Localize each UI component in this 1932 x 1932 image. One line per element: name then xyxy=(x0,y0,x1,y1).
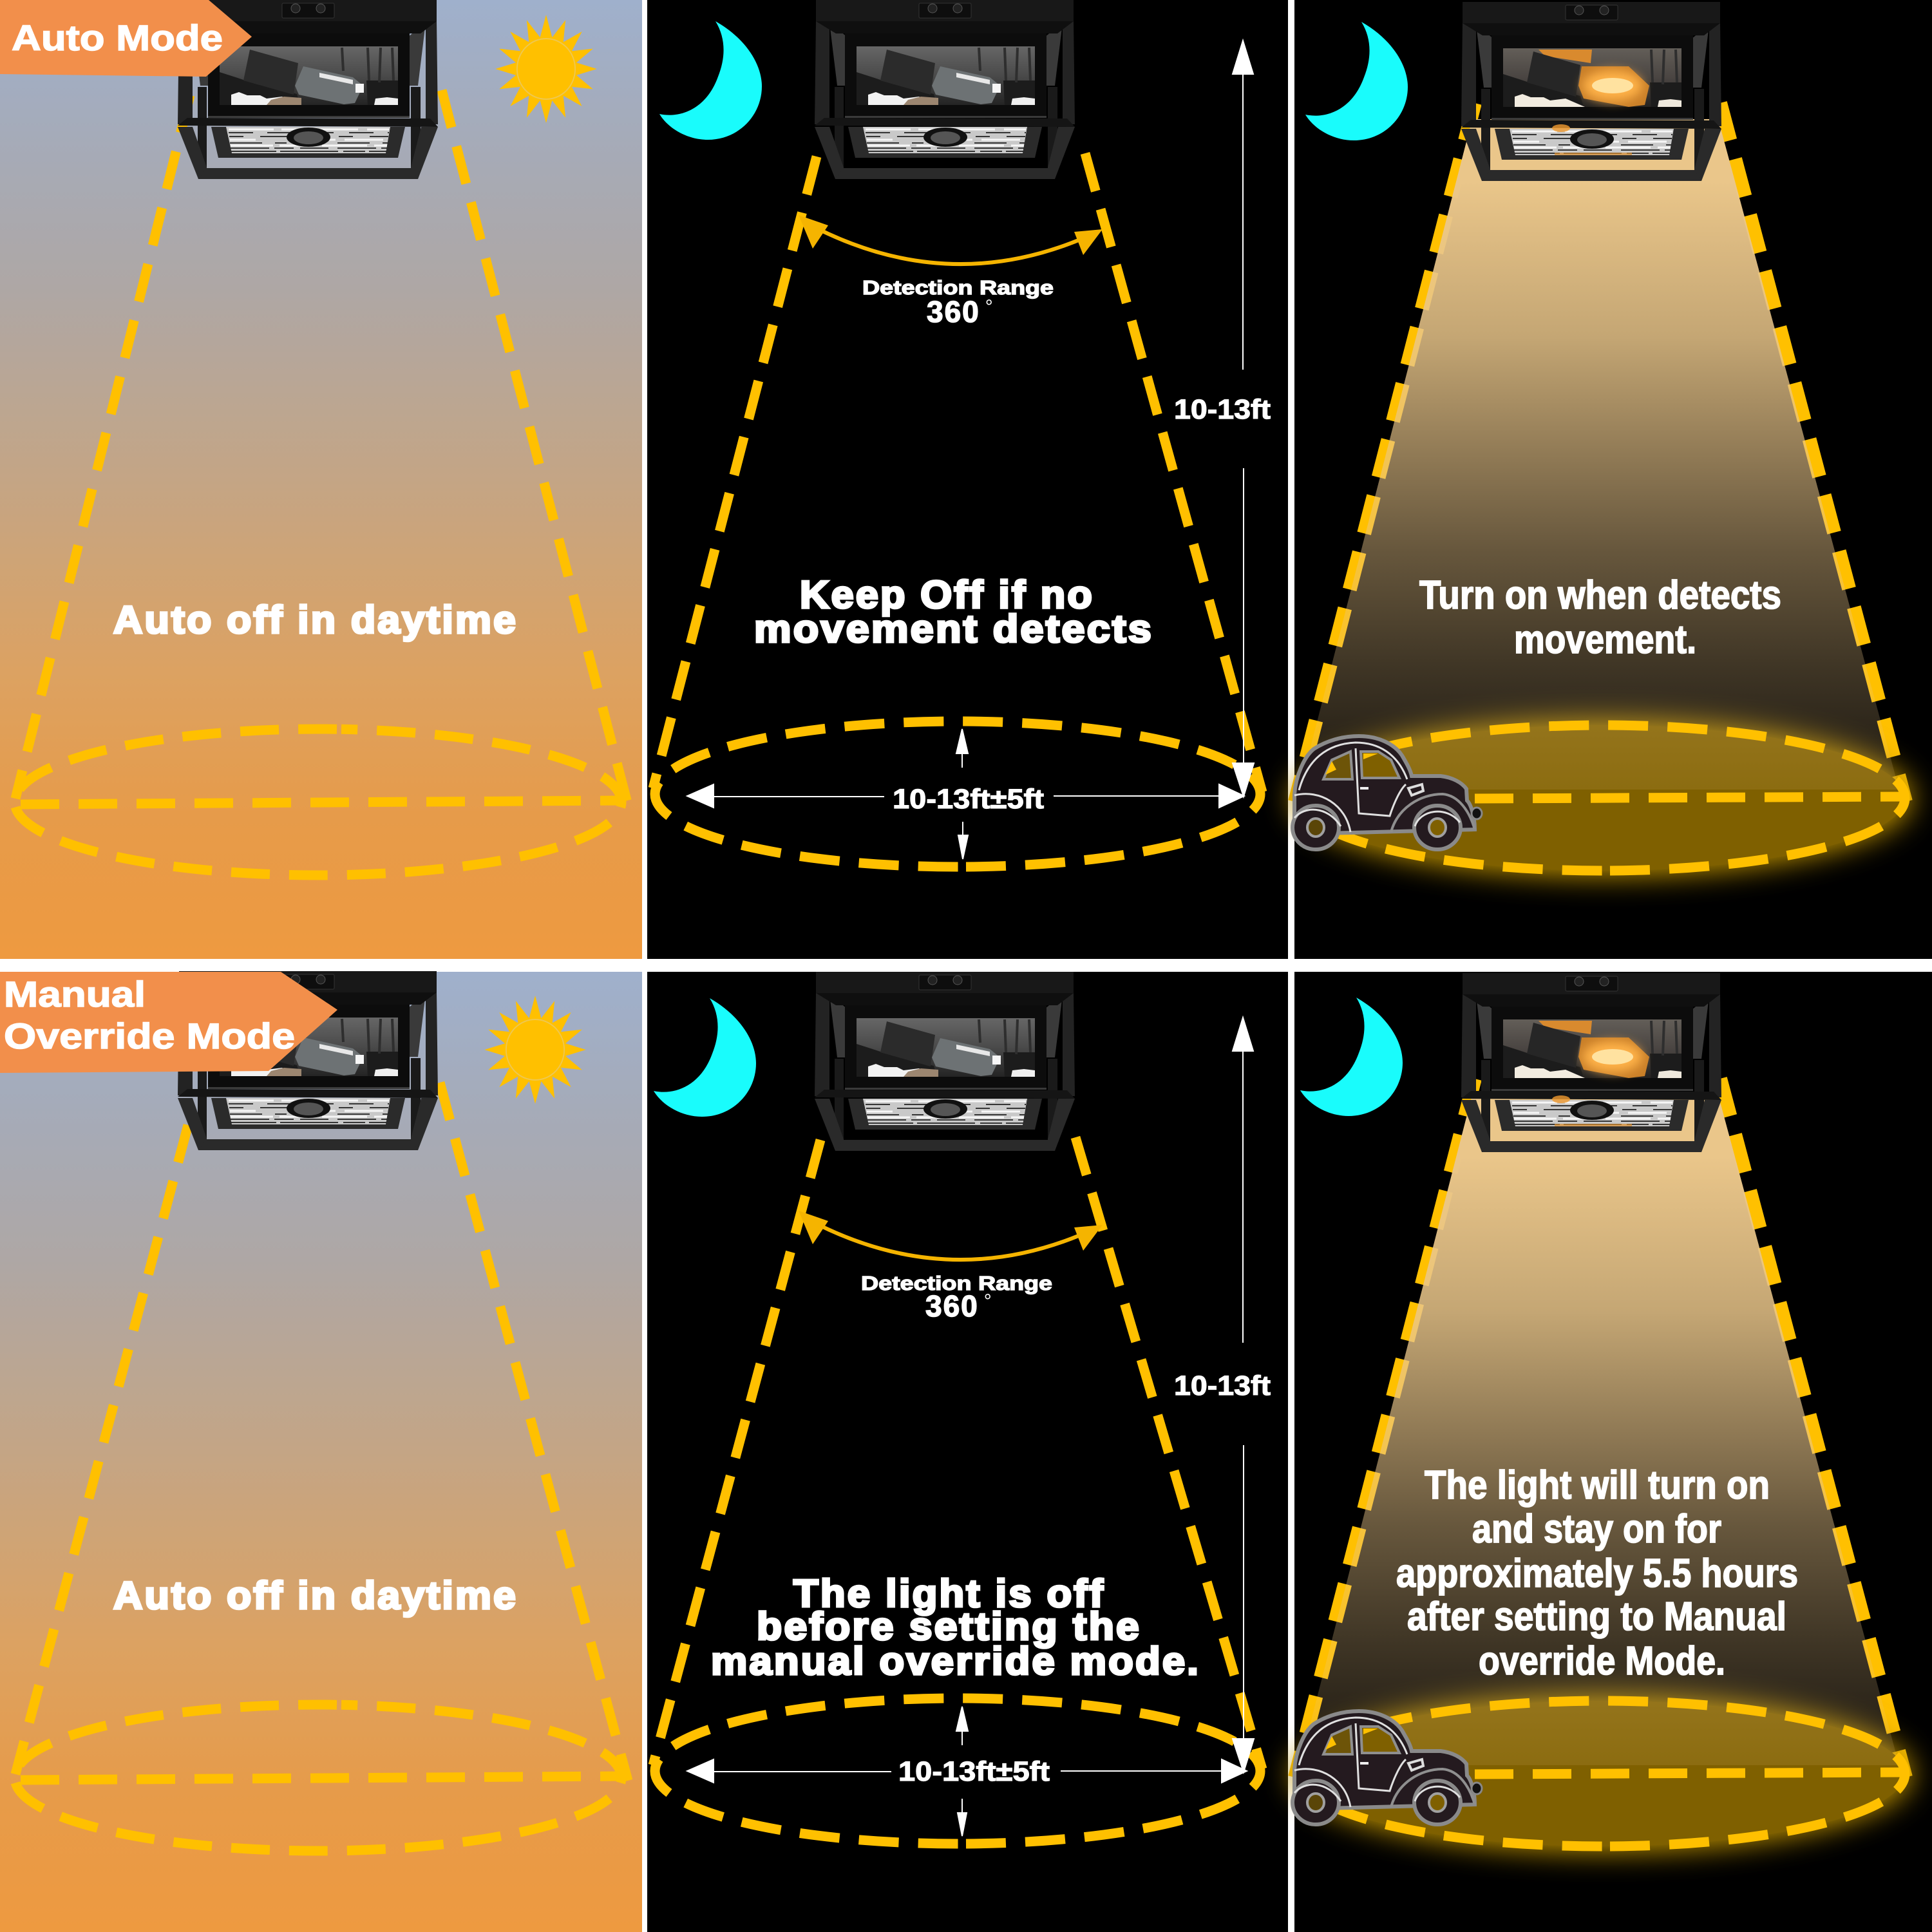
tag: manual override mode: Manual xyxy=(4,974,146,1014)
text: turn on when detects movement: Turn on when detects xyxy=(1419,573,1781,618)
ceiling lamp off xyxy=(178,0,438,179)
text: auto off in daytime: Auto off in daytime xyxy=(113,598,518,641)
panel: manual override before setting xyxy=(647,972,1288,1932)
detection ellipse xyxy=(15,1705,623,1851)
icon: moon xyxy=(1305,22,1408,140)
text: light is off before setting: The light is off xyxy=(793,1572,1105,1615)
tag: auto mode xyxy=(0,0,252,77)
ceiling lamp off xyxy=(815,972,1075,1151)
detection cone dashes xyxy=(15,90,628,805)
night background xyxy=(1294,0,1932,959)
night background xyxy=(647,0,1288,959)
text: turn on when detects movement: movement. xyxy=(1514,618,1696,662)
sky background xyxy=(0,0,642,959)
text: range 10-13ft plus minus 5ft: 10-13ft±5ft xyxy=(893,784,1044,815)
panel: manual override light on xyxy=(1292,972,1932,1932)
text: height 10-13ft: 10-13ft xyxy=(1174,1370,1271,1401)
arrow: mounting height xyxy=(1233,41,1254,797)
text: stays on 5.5 hours: override Mode. xyxy=(1479,1639,1725,1683)
icon: car xyxy=(1293,1711,1482,1824)
text: light is off before setting: before setting the xyxy=(757,1605,1141,1648)
text: keep off if no movement xyxy=(754,573,1153,650)
text: stays on 5.5 hours: after setting to Manual xyxy=(1407,1595,1786,1639)
detection ellipse xyxy=(15,729,623,875)
ceiling lamp on xyxy=(1461,973,1721,1152)
tag: auto mode: Auto Mode xyxy=(12,17,223,58)
text: 360 degrees: 360 xyxy=(925,1289,979,1323)
panel: auto mode daytime xyxy=(0,0,642,959)
night background xyxy=(1294,972,1932,1932)
panel: auto mode night movement detected xyxy=(1292,0,1932,959)
text: keep off if no movement: movement detects xyxy=(754,607,1153,650)
text: turn on when detects movement xyxy=(1419,573,1781,662)
arrows: range width and depth xyxy=(687,729,1244,859)
text: stays on 5.5 hours xyxy=(1396,1463,1798,1683)
arrow: detection arc xyxy=(799,215,1103,264)
text: 360 degrees: 360 xyxy=(927,295,980,328)
text: keep off if no movement: Keep Off if no xyxy=(800,573,1094,616)
arrows: range width and depth xyxy=(687,1707,1247,1836)
text: light is off before setting xyxy=(711,1572,1200,1683)
text: height 10-13ft: 10-13ft xyxy=(1174,394,1271,425)
text: range 10-13ft plus minus 5ft: 10-13ft±5ft xyxy=(898,1756,1050,1787)
text: detection range: Detection Range xyxy=(861,1272,1052,1294)
detection ellipse xyxy=(655,1698,1260,1844)
panel: manual override daytime xyxy=(0,971,642,1932)
light beam and dashed detection zone xyxy=(1292,1079,1913,1852)
arrow: detection arc xyxy=(799,1211,1103,1260)
ceiling lamp on xyxy=(1461,2,1721,181)
icon: moon xyxy=(1300,998,1403,1116)
panel: auto mode night no movement xyxy=(647,0,1288,959)
sky background xyxy=(0,972,642,1932)
text: stays on 5.5 hours: approximately 5.5 hours xyxy=(1396,1551,1798,1596)
ceiling lamp off xyxy=(815,0,1075,179)
text: light is off before setting: manual override mode. xyxy=(711,1640,1200,1683)
icon: car xyxy=(1293,736,1482,849)
icon: sun xyxy=(495,15,597,123)
tag: manual override mode xyxy=(0,972,337,1073)
text: auto off in daytime: Auto off in daytime xyxy=(113,1574,518,1617)
detection cone dashes xyxy=(653,1137,1262,1769)
detection cone dashes xyxy=(15,1083,628,1781)
night background xyxy=(647,972,1288,1932)
text: 360 degrees: ° xyxy=(985,296,994,317)
text: detection range: Detection Range xyxy=(862,276,1054,299)
ceiling lamp off xyxy=(178,971,438,1150)
light beam and dashed detection zone xyxy=(1292,103,1913,876)
icon: moon xyxy=(659,21,762,140)
icon: moon xyxy=(654,998,756,1117)
detection cone dashes xyxy=(653,153,1262,792)
arrow: mounting height xyxy=(1233,1018,1254,1772)
detection ellipse xyxy=(655,721,1260,867)
text: stays on 5.5 hours: The light will turn on xyxy=(1425,1463,1770,1508)
tag: manual override mode: Override Mode xyxy=(4,1016,295,1056)
text: stays on 5.5 hours: and stay on for xyxy=(1472,1507,1721,1551)
icon: sun xyxy=(484,996,586,1104)
text: 360 degrees: ° xyxy=(984,1291,993,1312)
